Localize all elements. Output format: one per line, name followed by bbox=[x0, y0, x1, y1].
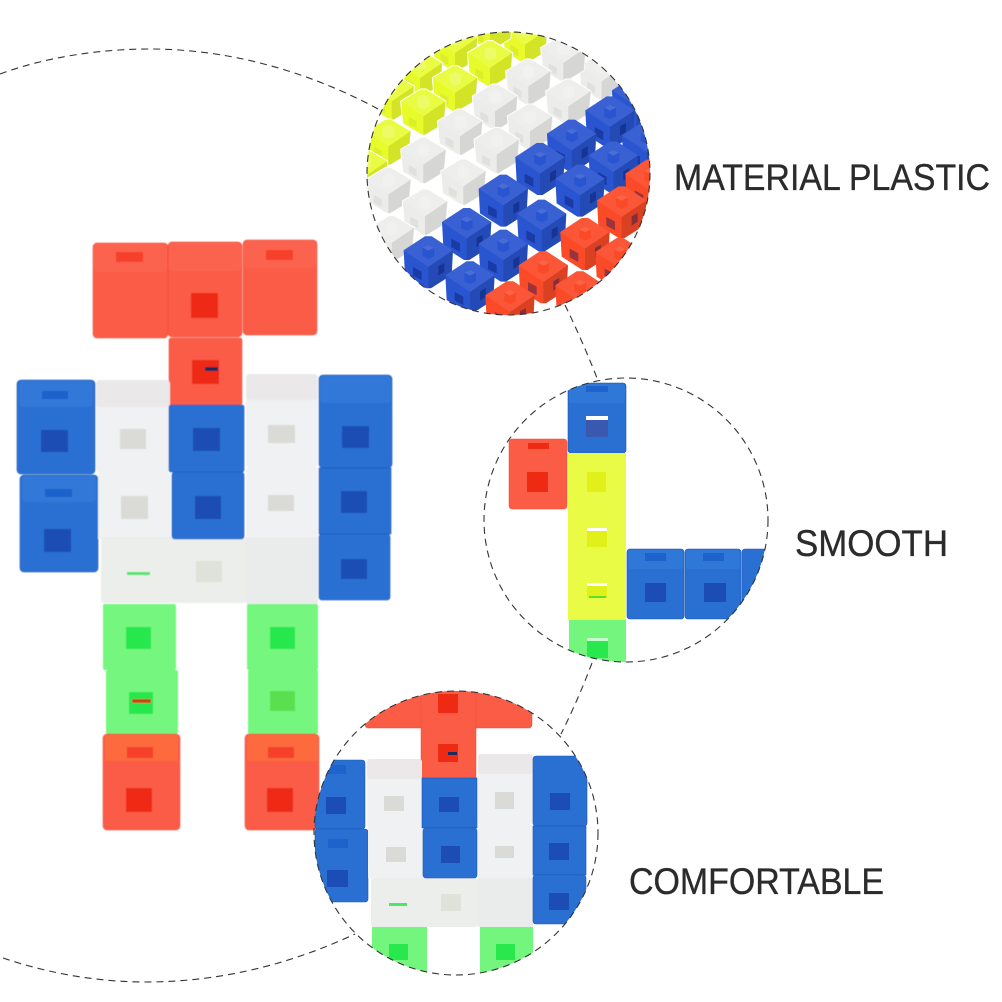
circle: material close-up of loose cubes bbox=[342, 4, 675, 333]
robot feet: orange cubes bbox=[103, 734, 319, 830]
label: comfortable: COMFORTABLE bbox=[629, 861, 884, 902]
blue cubes bbox=[404, 76, 671, 313]
robot built from cubes bbox=[17, 240, 392, 830]
blue horizontal cubes bbox=[627, 549, 782, 619]
close-up white torso bbox=[367, 754, 533, 927]
yellow cubes bbox=[342, 4, 548, 195]
robot neck bbox=[169, 338, 242, 405]
robot left arm bbox=[17, 380, 98, 572]
large dashed arc: bottom bbox=[3, 934, 355, 982]
large dashed arc: top bbox=[0, 49, 380, 110]
circle: comfortable close-up of robot torso bbox=[314, 691, 598, 977]
blue top cube bbox=[568, 383, 626, 453]
close-up right arm bbox=[533, 756, 587, 924]
red side cube bbox=[509, 439, 567, 509]
close-up green legs bbox=[372, 927, 533, 977]
robot head bbox=[93, 240, 317, 338]
robot legs: green cubes bbox=[103, 604, 318, 734]
robot chest: blue cubes bbox=[169, 405, 244, 539]
white cubes bbox=[366, 36, 624, 262]
dashed connector: smooth to comfortable bbox=[561, 663, 592, 734]
robot torso: white cubes bbox=[96, 374, 318, 604]
dashed connector: material to smooth bbox=[565, 305, 597, 378]
orange cubes bbox=[485, 160, 675, 333]
circle: smooth close-up bbox=[484, 378, 782, 665]
close-up head and neck bbox=[365, 691, 532, 778]
yellow column bbox=[568, 453, 626, 620]
robot right arm bbox=[319, 375, 392, 600]
green cube bbox=[569, 620, 626, 665]
close-up blue chest bbox=[422, 778, 477, 878]
close-up left arm bbox=[315, 760, 368, 902]
label: smooth: SMOOTH bbox=[795, 523, 948, 564]
